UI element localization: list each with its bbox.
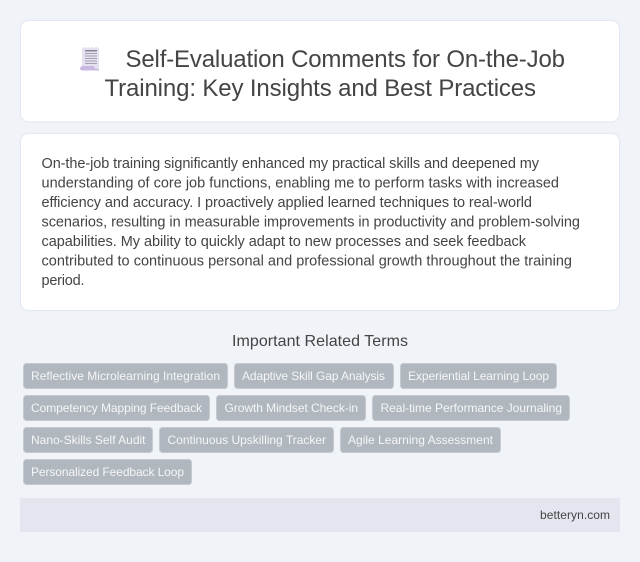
tag xyxy=(160,428,334,452)
text block: evaluation paragraph: contributed to continuous personal and professional growth throughout the training xyxy=(42,254,572,270)
text block: evaluation paragraph: period. xyxy=(42,273,84,289)
text block: evaluation paragraph: understanding of core job functions, enabling me to perform tasks with increased xyxy=(42,176,559,192)
tag: Agile Learning Assessment xyxy=(348,433,494,447)
heading: important related terms: Important Related Terms xyxy=(232,333,408,350)
tag: Experiential Learning Loop xyxy=(408,369,549,383)
text block: evaluation paragraph: On-the-job training significantly enhanced my practical skills and deepened my xyxy=(42,156,540,172)
tag: Growth Mindset Check-in xyxy=(224,401,358,415)
tag xyxy=(24,428,152,452)
tag xyxy=(24,396,210,420)
tag xyxy=(24,460,192,484)
tag xyxy=(340,428,500,452)
tag xyxy=(216,396,366,420)
tag: Adaptive Skill Gap Analysis xyxy=(242,369,385,383)
tag: Personalized Feedback Loop xyxy=(31,465,184,479)
icon: document scroll xyxy=(80,47,99,70)
tag list xyxy=(24,364,570,484)
title: Training: Key Insights and Best Practices xyxy=(104,75,536,102)
tag xyxy=(372,396,570,420)
panel: title card xyxy=(20,20,620,122)
tag: Nano-Skills Self Audit xyxy=(31,433,146,447)
tag xyxy=(234,364,394,388)
tag: Reflective Microlearning Integration xyxy=(31,369,220,383)
text block: evaluation paragraph: efficiency and accuracy. I proactively applied learned techniques to real-world xyxy=(42,195,532,211)
tag: Real-time Performance Journaling xyxy=(380,401,562,415)
tag: Competency Mapping Feedback xyxy=(31,401,203,415)
footer source text: betteryn.com xyxy=(540,508,610,522)
text block: evaluation paragraph: scenarios, resulting in measurable improvements in productivity and problem-solving xyxy=(42,214,580,230)
tag xyxy=(400,364,556,388)
text block: evaluation paragraph: capabilities. My ability to quickly adapt to new processes and seek feedback xyxy=(42,234,527,250)
tag xyxy=(24,364,228,388)
title: Self-Evaluation Comments for On-the-Job xyxy=(126,46,565,73)
footer xyxy=(20,498,620,532)
tag: Continuous Upskilling Tracker xyxy=(168,433,326,447)
text block: evaluation paragraph xyxy=(42,156,580,289)
title xyxy=(104,46,565,102)
panel: self-evaluation text xyxy=(20,134,620,310)
